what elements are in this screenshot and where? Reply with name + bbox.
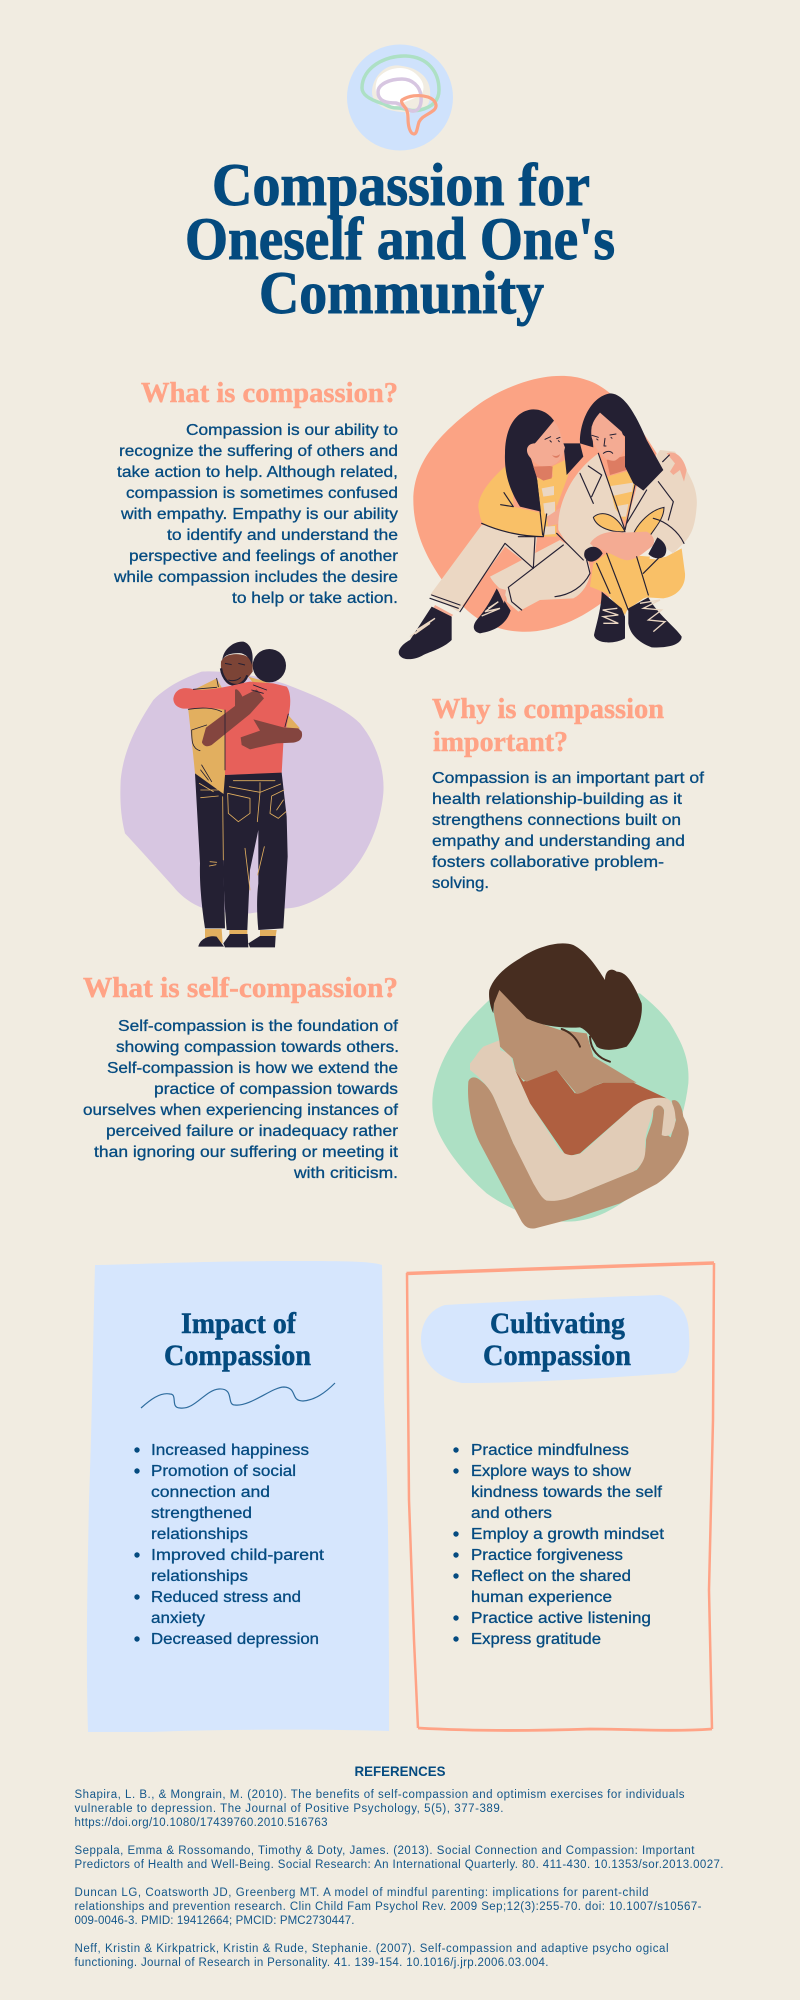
text block: why is compassion important: fosters collaborative problem- <box>432 854 664 871</box>
title: Community <box>259 260 544 326</box>
bullet list: impact: relationships <box>151 1526 248 1543</box>
bullet list: cultivating: Practice forgiveness <box>471 1547 623 1564</box>
text block: what is compassion: while compassion includes the desire <box>113 569 398 586</box>
text block: why is compassion important: health relationship-building as it <box>432 791 683 808</box>
title <box>185 152 615 326</box>
text block: what is self-compassion: with criticism. <box>293 1165 398 1182</box>
text block: what is compassion: to help or take action. <box>232 590 398 607</box>
text block: what is compassion: with empathy. Empathy is our ability <box>120 506 398 523</box>
heading: references: REFERENCES <box>354 1763 446 1779</box>
references list: Seppala, Emma & Rossomando, Timothy & Doty, James. (2013). Social Connection and Compassion: Important <box>74 1845 695 1857</box>
bullet list: cultivating: kindness towards the self <box>471 1484 663 1501</box>
bullet list: cultivating: Practice active listening <box>471 1610 651 1627</box>
text block: what is self-compassion: practice of compassion towards <box>154 1081 398 1098</box>
bullet list: cultivating: Express gratitude <box>471 1631 601 1648</box>
text block: what is compassion: recognize the suffering of others and <box>119 443 398 460</box>
bullet list: cultivating: human experience <box>471 1589 612 1606</box>
bullet list: impact: connection and <box>151 1484 270 1501</box>
heading: what is self-compassion: What is self-compassion? <box>83 973 398 1004</box>
text block: what is compassion: Compassion is our ability to <box>186 422 398 439</box>
squiggle underline <box>141 1383 335 1408</box>
text block: why is compassion important: empathy and understanding and <box>432 833 685 850</box>
text block: what is compassion: compassion is sometimes confused <box>126 485 398 502</box>
panel: impact of compassion <box>87 1261 389 1732</box>
text block: what is self-compassion: showing compassion towards others. <box>116 1039 399 1056</box>
text block: what is compassion <box>113 422 399 607</box>
heading: cultivating compassion: Cultivating <box>490 1307 625 1340</box>
illustration: two people hugging <box>120 642 384 947</box>
bullet list: impact: Reduced stress and <box>151 1589 301 1606</box>
bullet list: cultivating <box>453 1442 665 1648</box>
references list: Neff, Kristin & Kirkpatrick, Kristin & Rude, Stephanie. (2007). Self-compassion and adaptive psycho ogical <box>74 1943 669 1955</box>
heading: impact of compassion <box>164 1307 311 1372</box>
text block: why is compassion important: strengthens connections built on <box>432 812 681 829</box>
text block: why is compassion important: Compassion is an important part of <box>432 770 705 787</box>
references list: relationships and prevention research. Clin Child Fam Psychol Rev. 2009 Sep;12(3):255-70. doi: 10.1007/s10567- <box>74 1901 702 1913</box>
title: Oneself and One's <box>185 206 615 272</box>
references list: functioning. Journal of Research in Personality. 41. 139-154. 10.1016/j.jrp.2006.03.004. <box>74 1957 548 1969</box>
text block: what is self-compassion: perceived failure or inadequacy rather <box>106 1123 399 1140</box>
text block: what is self-compassion: Self-compassion is the foundation of <box>118 1018 399 1035</box>
illustration: two friends sitting <box>399 376 697 659</box>
heading: why is compassion important: Why is compassion <box>432 694 664 725</box>
bullet list: impact: strengthened <box>151 1505 252 1522</box>
bullet list: cultivating: and others <box>471 1505 552 1522</box>
heading: impact of compassion: Impact of <box>181 1307 297 1340</box>
bullet list: impact <box>134 1442 325 1648</box>
panel: cultivating compassion <box>406 1263 714 1730</box>
references list: https://doi.org/10.1080/17439760.2010.516763 <box>74 1817 328 1829</box>
references list: Shapira, L. B., & Mongrain, M. (2010). The benefits of self-compassion and optimism exercises for individuals <box>74 1789 685 1801</box>
bullet list: cultivating: Practice mindfulness <box>471 1442 629 1459</box>
heading: cultivating compassion <box>483 1307 631 1372</box>
heading: impact of compassion: Compassion <box>164 1339 311 1372</box>
references list: Predictors of Health and Well-Being. Social Research: An International Quarterly. 80. 411-430. 10.1353/sor.2013.0027. <box>74 1859 724 1871</box>
text block: what is self-compassion: ourselves when experiencing instances of <box>83 1102 399 1119</box>
text block: what is compassion: take action to help. Although related, <box>117 464 398 481</box>
heading: why is compassion important <box>432 694 664 758</box>
bullet list: impact: Increased happiness <box>151 1442 309 1459</box>
text block: what is self-compassion: than ignoring our suffering or meeting it <box>94 1144 399 1161</box>
bullet list: impact: anxiety <box>151 1610 205 1627</box>
references list: Duncan LG, Coatsworth JD, Greenberg MT. A model of mindful parenting: implications for parent-child <box>74 1887 648 1899</box>
references list: vulnerable to depression. The Journal of Positive Psychology, 5(5), 377-389. <box>74 1803 504 1815</box>
text block: what is compassion: to identify and understand the <box>167 527 398 544</box>
text block: why is compassion important <box>432 770 705 892</box>
title: Compassion for <box>212 152 590 218</box>
bullet list: impact: relationships <box>151 1568 248 1585</box>
heading: what is compassion: What is compassion? <box>141 378 398 409</box>
heading background blob <box>421 1295 689 1383</box>
heading: why is compassion important: important? <box>433 727 568 758</box>
text block: what is self-compassion: Self-compassion is how we extend the <box>107 1060 398 1077</box>
text block: what is compassion: perspective and feelings of another <box>129 548 399 565</box>
references list: 009-0046-3. PMID: 19412664; PMCID: PMC2730447. <box>74 1915 354 1927</box>
bullet list: cultivating: Explore ways to show <box>471 1463 631 1480</box>
bullet list: cultivating: Reflect on the shared <box>471 1568 631 1585</box>
heading: cultivating compassion: Compassion <box>483 1339 631 1372</box>
text block: what is self-compassion <box>83 1018 399 1182</box>
bullet list: impact: Promotion of social <box>151 1463 296 1480</box>
bullet list: cultivating: Employ a growth mindset <box>471 1526 665 1543</box>
references list <box>74 1789 724 1969</box>
text block: why is compassion important: solving. <box>432 875 489 892</box>
illustration: woman hugging herself <box>432 943 689 1229</box>
bullet list: impact: Improved child-parent <box>151 1547 325 1564</box>
icon: brain logo <box>347 44 453 150</box>
bullet list: impact: Decreased depression <box>151 1631 319 1648</box>
